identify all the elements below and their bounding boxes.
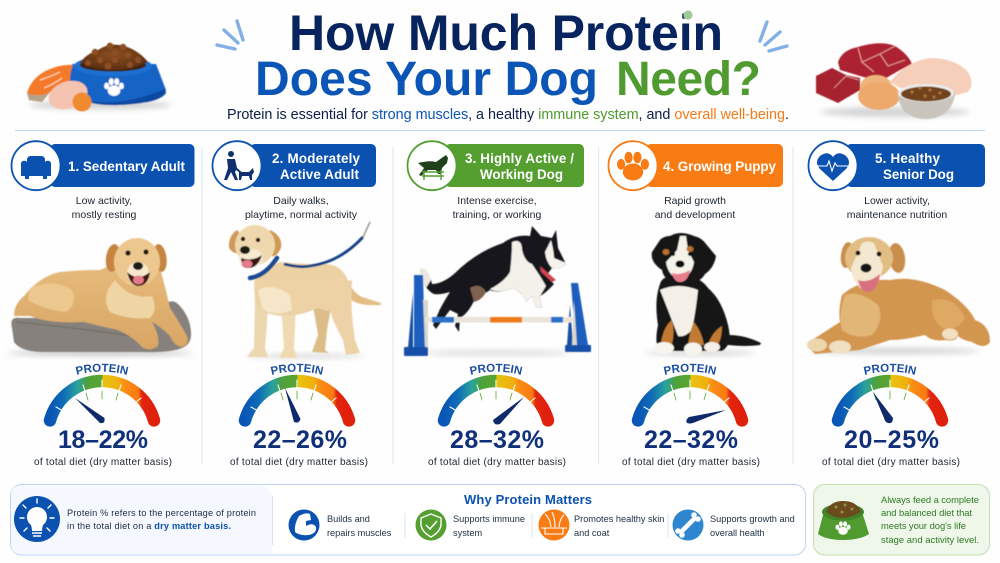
header banner	[808, 141, 985, 190]
protein range: 22–32%	[644, 426, 738, 454]
basis note: of total diet (dry matter basis)	[622, 457, 760, 468]
benefit: immune: Supports immune	[453, 514, 525, 524]
dry matter note: in the total diet on a dry matter basis.	[67, 521, 231, 531]
standing dog with leash	[229, 222, 381, 358]
description: training, or working	[453, 209, 542, 221]
title: Does Your Dog	[255, 53, 598, 106]
header banner: Working Dog	[480, 167, 563, 182]
protein range: 18–22%	[58, 426, 148, 454]
protein gauge: PROTEIN	[864, 364, 916, 375]
sparkle accents left	[217, 21, 243, 49]
protein gauge: PROTEIN	[664, 364, 716, 375]
benefit: growth: overall health	[710, 528, 765, 538]
header banner: 2. Moderately	[272, 151, 361, 166]
description: maintenance nutrition	[847, 209, 947, 221]
description: Rapid growth	[664, 195, 726, 207]
icon: green bowl	[818, 501, 869, 540]
protein gauge	[632, 364, 748, 427]
protein range: 20–25%	[844, 426, 939, 454]
basis note: of total diet (dry matter basis)	[822, 457, 960, 468]
panel: moderately active adult	[212, 140, 382, 468]
dog on bed	[8, 238, 192, 356]
needle	[75, 398, 105, 423]
icon: light bulb	[14, 496, 60, 542]
subtitle: Protein is essential for strong muscles, a healthy immune system, and overall well-being.	[227, 107, 789, 123]
header banner	[608, 141, 783, 190]
benefit: immune	[416, 510, 525, 540]
header banner	[212, 141, 376, 190]
protein range: 28–32%	[450, 426, 544, 454]
callout: balanced diet: and balanced diet that	[881, 507, 972, 518]
benefit: muscles: repairs muscles	[327, 528, 392, 538]
benefit: growth	[672, 510, 795, 540]
benefit: growth: Supports growth and	[710, 514, 795, 524]
puppy	[645, 233, 761, 356]
title	[255, 5, 761, 106]
dry matter note: Protein % refers to the percentage of protein	[67, 508, 256, 518]
panel: sedentary adult	[10, 140, 194, 468]
header banner: Senior Dog	[883, 167, 954, 182]
basis note: of total diet (dry matter basis)	[428, 457, 566, 468]
panel: healthy senior dog	[806, 140, 991, 468]
protein gauge	[832, 364, 948, 427]
needle	[686, 410, 726, 424]
header banner: Active Adult	[280, 167, 360, 182]
description: Daily walks,	[273, 195, 329, 207]
header banner: 5. Healthy	[875, 151, 941, 166]
jumping dog over hurdle	[404, 226, 591, 356]
description: Intense exercise,	[457, 195, 537, 207]
basis note: of total diet (dry matter basis)	[230, 457, 368, 468]
header banner	[408, 141, 584, 190]
panel: highly active working dog	[403, 140, 592, 468]
title: Need?	[616, 53, 761, 106]
panel: why protein matters	[10, 484, 806, 555]
protein gauge	[238, 364, 356, 427]
description: mostly resting	[72, 209, 137, 221]
header banner: 4. Growing Puppy	[663, 159, 777, 174]
description: Lower activity,	[864, 195, 930, 207]
callout: balanced diet	[814, 484, 990, 555]
heading: Why Protein Matters	[464, 492, 592, 507]
panel: growing puppy	[608, 140, 783, 468]
benefit: immune: system	[453, 528, 482, 538]
basis note: of total diet (dry matter basis)	[34, 457, 172, 468]
protein gauge: PROTEIN	[270, 364, 324, 375]
hurdle	[404, 275, 591, 356]
header banner	[12, 141, 194, 190]
description: playtime, normal activity	[245, 209, 358, 221]
benefit: muscles: Builds and	[327, 514, 370, 524]
illustration: raw meat, eggs, chicken and kibble	[816, 43, 972, 119]
benefit: skin and coat	[538, 510, 664, 540]
needle	[873, 392, 893, 423]
illustration: dog bowl with salmon	[27, 43, 172, 114]
callout: balanced diet: Always feed a complete	[881, 494, 979, 505]
protein gauge: PROTEIN	[76, 364, 128, 375]
description: Low activity,	[76, 195, 132, 207]
callout: balanced diet: meets your dog's life	[881, 520, 966, 531]
needle	[493, 397, 524, 424]
benefit: skin and coat: and coat	[574, 528, 610, 538]
lying senior dog	[807, 237, 990, 354]
title: How Much Protein	[289, 5, 723, 61]
callout: balanced diet: stage and activity level.	[881, 534, 979, 545]
needle	[285, 388, 300, 423]
sparkle accents right	[760, 22, 787, 51]
benefit: muscles	[288, 510, 392, 540]
protein range: 22–26%	[253, 426, 347, 454]
header banner: 3. Highly Active /	[465, 151, 574, 166]
header banner: 1. Sedentary Adult	[68, 159, 186, 174]
description: and development	[655, 209, 735, 221]
benefit: skin and coat: Promotes healthy skin	[574, 514, 664, 524]
protein gauge	[438, 364, 554, 427]
protein gauge	[44, 364, 160, 427]
protein gauge: PROTEIN	[470, 364, 522, 375]
